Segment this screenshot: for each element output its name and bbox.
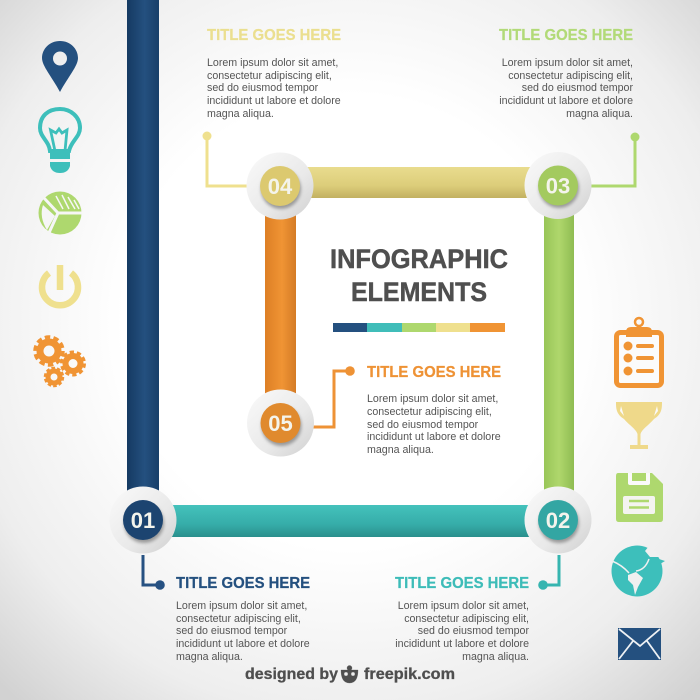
icon: map pin — [42, 41, 78, 92]
text block: item 02 — [395, 575, 529, 663]
icon: gears — [35, 337, 84, 386]
square frame of coloured bars — [127, 0, 574, 537]
icon: envelope — [618, 628, 661, 660]
text block: item 02: consectetur adipiscing elit, — [404, 613, 529, 625]
node 05: 05 — [268, 411, 293, 436]
text block: item 04: incididunt ut labore et dolore — [207, 95, 341, 107]
text block: item 05: Lorem ipsum dolor sit amet, — [367, 393, 498, 405]
text block: item 01: sed do eiusmod tempor — [176, 625, 288, 637]
icon: globe — [612, 546, 665, 596]
text block: item 03: incididunt ut labore et dolore — [499, 95, 633, 107]
text block: item 04: sed do eiusmod tempor — [207, 82, 319, 94]
node 04: 04 — [268, 174, 293, 199]
node 05 — [247, 390, 314, 456]
icon: trophy — [616, 402, 662, 449]
main heading — [330, 244, 508, 307]
node 04 — [246, 152, 314, 220]
node 01: 01 — [131, 508, 155, 533]
icon: clipboard — [616, 318, 662, 386]
text block: item 04 — [207, 27, 341, 120]
credit line — [245, 666, 455, 683]
text block: item 03: consectetur adipiscing elit, — [508, 70, 633, 82]
main heading: INFOGRAPHIC — [330, 244, 508, 274]
node 03: 03 — [546, 174, 570, 198]
icon: light bulb — [40, 109, 80, 173]
text block: item 03: TITLE GOES HERE — [499, 27, 633, 44]
text block: item 01: Lorem ipsum dolor sit amet, — [176, 600, 307, 612]
credit line: designed by — [245, 666, 338, 683]
connector: item 03 — [590, 132, 640, 186]
credit line: freepik.com — [364, 666, 455, 683]
text block: item 05: consectetur adipiscing elit, — [367, 406, 492, 418]
text block: item 04: consectetur adipiscing elit, — [207, 70, 332, 82]
connector: item 01 — [143, 555, 165, 590]
text block: item 02: magna aliqua. — [462, 651, 529, 663]
text block: item 04: Lorem ipsum dolor sit amet, — [207, 57, 338, 69]
icon: pie chart — [38, 192, 82, 235]
text block: item 01: magna aliqua. — [176, 651, 243, 663]
text block: item 05 — [367, 364, 501, 456]
text block: item 01: consectetur adipiscing elit, — [176, 613, 301, 625]
text block: item 02: Lorem ipsum dolor sit amet, — [398, 600, 529, 612]
node 02 — [524, 486, 592, 554]
node 01 — [110, 486, 176, 554]
text block: item 03: magna aliqua. — [566, 108, 633, 120]
text block: item 03: sed do eiusmod tempor — [522, 82, 633, 94]
text block: item 01 — [176, 575, 310, 663]
main heading: ELEMENTS — [351, 277, 487, 307]
node 02: 02 — [546, 508, 570, 533]
text block: item 03 — [499, 27, 633, 120]
text block: item 05: incididunt ut labore et dolore — [367, 431, 501, 443]
icon: floppy disk — [616, 473, 663, 522]
text block: item 02: TITLE GOES HERE — [395, 575, 529, 592]
connector: item 04 — [202, 132, 250, 186]
text block: item 04: magna aliqua. — [207, 108, 274, 120]
connector: item 02 — [538, 555, 559, 590]
text block: item 02: incididunt ut labore et dolore — [395, 638, 529, 650]
node 03 — [524, 152, 592, 219]
text block: item 05: sed do eiusmod tempor — [367, 419, 479, 431]
text block: item 01: incididunt ut labore et dolore — [176, 638, 310, 650]
text block: item 02: sed do eiusmod tempor — [418, 625, 529, 637]
text block: item 05: magna aliqua. — [367, 444, 434, 456]
text block: item 05: TITLE GOES HERE — [367, 364, 501, 381]
text block: item 04: TITLE GOES HERE — [207, 27, 341, 44]
icon: power symbol — [42, 265, 78, 305]
connector: item 05 — [312, 366, 355, 427]
icon: freepik logo — [341, 666, 358, 683]
text block: item 03: Lorem ipsum dolor sit amet, — [502, 57, 633, 69]
colour strip — [333, 323, 505, 332]
text block: item 01: TITLE GOES HERE — [176, 575, 310, 592]
